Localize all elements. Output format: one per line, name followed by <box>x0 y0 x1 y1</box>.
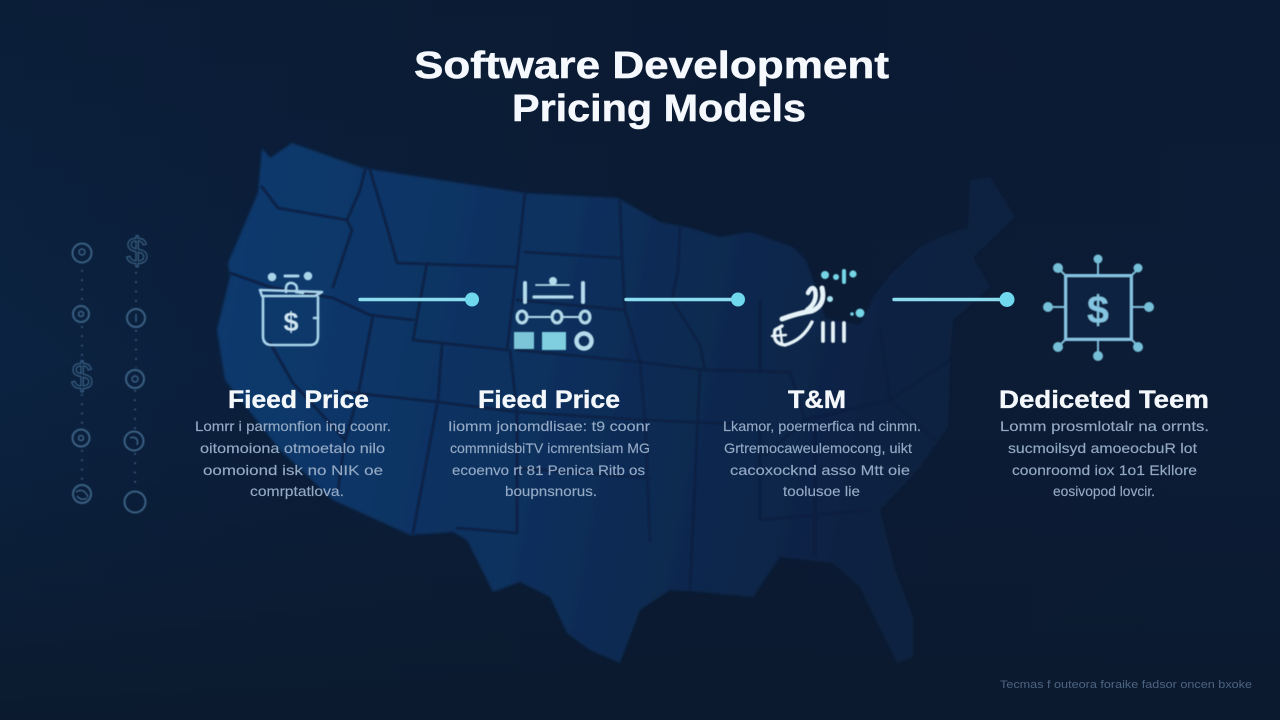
title: Software Development <box>414 45 889 87</box>
description: eosivopod lovcir. <box>1053 483 1155 499</box>
map: United States silhouette <box>217 143 1015 663</box>
description: ecoenvo rt 81 Penica Ritb os <box>452 462 645 478</box>
description: sucmoilsyd amoeocbuR lot <box>1008 440 1197 456</box>
column: Fixed Price 2 <box>448 277 650 499</box>
description: Lkamor, poermerfica nd cinmn. <box>723 418 921 434</box>
arrow: connector 2 <box>626 292 745 306</box>
description <box>1000 418 1209 499</box>
icon: jar with dollar: $ <box>283 307 299 337</box>
decorative icon column: left side: $ <box>126 231 148 273</box>
icon: scale and nodes <box>514 277 592 350</box>
arrow: connector 3 <box>894 292 1014 307</box>
description: toolusoe lie <box>783 483 860 499</box>
description: comrptatlova. <box>250 483 344 499</box>
description: Grtremocaweulemocong, uikt <box>724 440 912 456</box>
icon: dollar in network square <box>1043 254 1154 361</box>
column: Fixed Price 1 <box>195 273 391 499</box>
icon: dollar in network square: $ <box>1087 289 1109 332</box>
description: oitomoiona otmoetalo nilo <box>200 440 385 456</box>
decorative icon column: left side: $ <box>71 356 93 398</box>
icon: jar with dollar <box>260 273 322 345</box>
heading: T&M <box>788 386 846 414</box>
description: Lomm prosmlotalr na orrnts. <box>1000 418 1209 434</box>
column: Dedicated Team <box>999 254 1209 499</box>
title: Pricing Models <box>512 88 806 130</box>
description: Lomrr i parmonfion ing coonr. <box>195 418 391 434</box>
description: oomoiond isk no NIK oe <box>203 462 383 478</box>
description <box>195 418 391 499</box>
footer note: Tecmas f outeora foraike fadsor oncen bxoke <box>1000 679 1252 691</box>
heading: Fieed Price <box>228 386 369 414</box>
description: coonroomd iox 1o1 Ekllore <box>1012 462 1197 478</box>
heading: Dediceted Teem <box>999 386 1209 414</box>
heading: Fieed Price <box>478 386 620 414</box>
decorative icon column: left side <box>71 231 148 512</box>
description <box>448 418 650 499</box>
description: commnidsbiTV icmrentsiam MG <box>450 440 650 456</box>
title <box>414 45 889 130</box>
column: T&M <box>723 269 921 499</box>
arrow: connector 1 <box>360 292 479 306</box>
description <box>723 418 921 499</box>
description: boupnsnorus. <box>505 483 597 499</box>
description: cacoxocknd asso Mtt oie <box>730 462 910 478</box>
icon: handwritten scribble with dots <box>772 269 864 345</box>
description: Iiomm jonomdlisae: t9 coonr <box>448 418 650 434</box>
